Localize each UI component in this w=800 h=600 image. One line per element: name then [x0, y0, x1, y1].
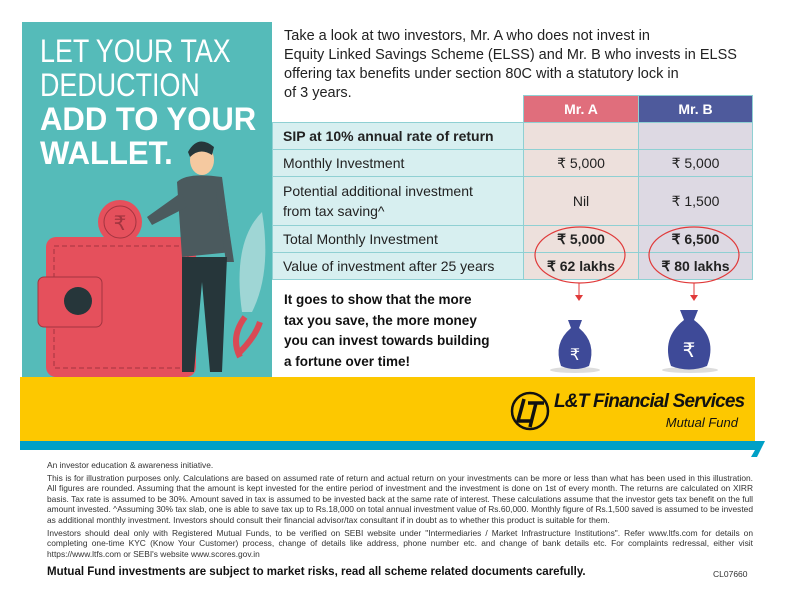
illustration: wallet, coin and man: ₹ — [114, 213, 126, 235]
table: investor comparison: Mr. B — [678, 101, 713, 117]
table: investor comparison: ₹ 5,000 — [557, 154, 605, 170]
illustration: wallet, coin and man — [38, 142, 266, 377]
table: investor comparison: ₹ 5,000 — [672, 154, 719, 170]
table: investor comparison: ₹ 5,000 — [557, 230, 605, 246]
table: investor comparison: Potential additional investment — [283, 183, 473, 199]
blue stripe — [20, 441, 765, 457]
table: investor comparison: from tax saving^ — [283, 203, 384, 219]
table: investor comparison: ₹ 6,500 — [672, 230, 719, 246]
table: investor comparison: Value of investment after 25 years — [283, 258, 494, 274]
table: investor comparison: Total Monthly Investment — [283, 231, 438, 247]
icons: money bags: ₹ — [683, 340, 695, 362]
code: CL07660 — [713, 569, 748, 579]
title: ADD TO YOUR — [40, 101, 256, 137]
logo: L&T Financial Services — [510, 391, 744, 430]
footnotes: Investors should deal only with Registered Mutual Funds, to be verified on SEBI website under "Intermediaries / Market Infrastructure Institutions". Refer www.ltfs.com for details on completing one-time KYC (Know Your Customer) process, change of details like address, phone number etc. and change of bank details etc. For complaints redressal, either visit https://www.ltfs.com or SEBI's website www.scores.gov.in — [47, 528, 753, 559]
intro text: of 3 years. — [284, 85, 352, 101]
title: WALLET. — [40, 135, 173, 171]
logo: L&T Financial Services: Mutual Fund — [666, 415, 738, 430]
panel: teal illustration — [22, 22, 272, 378]
icons: money bags: ₹ — [570, 347, 580, 364]
logo: L&T Financial Services: L&T Financial Services — [554, 391, 744, 412]
intro text: Equity Linked Savings Scheme (ELSS) and Mr. B who invests in ELSS — [284, 47, 737, 63]
table: investor comparison: SIP at 10% annual rate of return — [283, 128, 494, 144]
title — [40, 33, 256, 171]
conclusion text: It goes to show that the more — [284, 292, 472, 307]
table: investor comparison: Nil — [573, 193, 589, 209]
banner: yellow brand band — [20, 377, 755, 441]
intro text — [284, 28, 737, 101]
table: investor comparison: ₹ 80 lakhs — [661, 258, 730, 274]
callouts: red circles and arrows — [534, 226, 740, 301]
intro text: offering tax benefits under section 80C with a statutory lock in — [284, 66, 679, 82]
footnotes — [47, 460, 753, 559]
conclusion text: a fortune over time! — [284, 354, 410, 368]
table: investor comparison: ₹ 62 lakhs — [547, 258, 615, 274]
table: investor comparison: Mr. A — [564, 101, 598, 117]
footnotes: This is for illustration purposes only. Calculations are based on assumed rate of return and actual return on your investments can be more or less than what has been used in this illustration. All figures are rounded. Assuming that the amount is kept invested for the entire period of investment and the investment is done on 1st of every month. The returns are calculated on XIRR basis. Tax rate is assumed to be 30%. Amount saved in tax is assumed to be invested back at the same rate of interest. These calculations assume that the investor gets tax benefit on the full amount invested. ^Assuming 30% tax slab, one is able to save tax up to Rs.18,000 on total annual investment value of Rs.60,000. Monthly figure of Rs.1,500 saved is assumed to be invested as additional monthly investment. Investors should consult their financial advisor/tax consultant if in doubt as to whether this product is suitable for them. — [47, 473, 753, 525]
table: investor comparison: ₹ 1,500 — [672, 192, 719, 208]
icons: money bags — [550, 310, 718, 373]
intro text: Take a look at two investors, Mr. A who does not invest in — [284, 28, 650, 44]
footnotes: An investor education & awareness initiative. — [47, 460, 213, 470]
title: LET YOUR TAX — [40, 33, 231, 69]
conclusion text: tax you save, the more money — [284, 312, 477, 328]
disclaimer line: Mutual Fund investments are subject to market risks, read all scheme related documents carefully. — [47, 566, 586, 578]
conclusion text — [284, 292, 490, 368]
table: investor comparison: Monthly Investment — [283, 155, 404, 171]
table: investor comparison — [272, 95, 753, 280]
title: DEDUCTION — [40, 67, 200, 103]
conclusion text: you can invest towards building — [284, 333, 490, 348]
